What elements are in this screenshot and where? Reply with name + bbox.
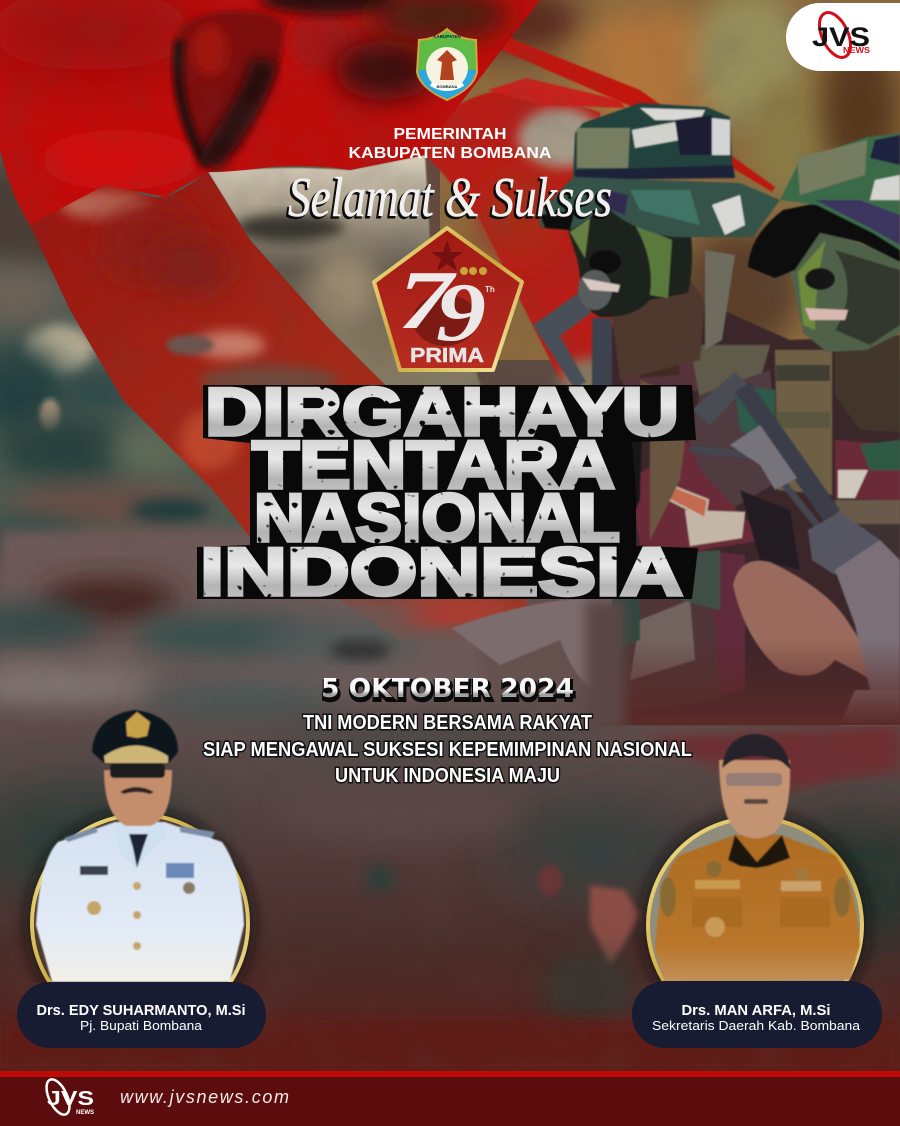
red flag: diagonal band (30, 172, 528, 640)
heading: government name: KABUPATEN BOMBANA (348, 145, 552, 162)
teal and brown storm clouds (0, 150, 600, 762)
hand gripping rifle (733, 561, 882, 678)
name plate: Man Arfa (632, 981, 882, 1048)
headline black extruded backing (197, 385, 698, 599)
top right JVS news logo: JVS (812, 22, 870, 52)
left soldier head (540, 103, 780, 380)
kabupaten bombana shield logo: BOMBANA (437, 84, 458, 89)
name plate: Man Arfa: Drs. MAN ARFA, M.Si (682, 1002, 830, 1019)
lower dark field (0, 725, 900, 1072)
right soldier head (748, 133, 900, 352)
name plate: Edy Suharmanto: Drs. EDY SUHARMANTO, M.Si (36, 1002, 246, 1019)
headline steel lettering: INDONESIA (200, 534, 683, 610)
main headline (197, 374, 698, 610)
theme tagline (203, 711, 692, 787)
rifle (452, 292, 900, 725)
cream flag fold with smoke (208, 155, 500, 440)
headline steel lettering: TENTARA (252, 427, 615, 503)
portrait: Edy Suharmanto (19, 709, 261, 983)
top right JVS news logo: NEWS (843, 46, 871, 55)
red flag: right sweep (425, 16, 775, 430)
headline steel lettering (200, 374, 683, 610)
forest backdrop (420, 0, 900, 360)
uniforms and gear (600, 300, 900, 725)
emblem: 79th PRIMA: Th (485, 285, 495, 294)
name plate: Edy Suharmanto (17, 982, 266, 1048)
script greeting: Selamat & Sukses (286, 169, 610, 231)
headline steel lettering: NASIONAL (254, 480, 620, 556)
name plate: Man Arfa: Sekretaris Daerah Kab. Bombana (652, 1019, 860, 1033)
emblem: 79th PRIMA: 7 (398, 254, 457, 347)
heading: government name: PEMERINTAH (394, 126, 506, 143)
footer JVS logo (42, 1076, 94, 1118)
website address: www.jvsnews.com (120, 1087, 289, 1107)
footer bar (0, 1071, 900, 1126)
portrait: Man Arfa (632, 733, 874, 982)
footer JVS logo: NEWS (76, 1110, 94, 1116)
kabupaten bombana shield logo: KABUPATEN (433, 34, 461, 39)
headline steel lettering: DIRGAHAYU (205, 374, 679, 450)
theme tagline: TNI MODERN BERSAMA RAKYAT (303, 711, 592, 734)
heading: government name (348, 126, 552, 162)
red flag: upper field with dark folds (0, 0, 560, 240)
emblem: 79th PRIMA (374, 228, 522, 370)
kabupaten bombana shield logo (417, 29, 477, 100)
footer JVS logo: JVS (47, 1088, 94, 1110)
name plate: Edy Suharmanto: Pj. Bupati Bombana (80, 1019, 202, 1033)
top right JVS news logo (786, 3, 900, 71)
date: 5 OKTOBER 2024 (321, 674, 574, 704)
theme tagline: SIAP MENGAWAL SUKSESI KEPEMIMPINAN NASIONAL (203, 738, 692, 761)
emblem: 79th PRIMA: PRIMA (410, 345, 484, 367)
soldiers with rifles (452, 103, 900, 730)
script greeting: Selamat & Sukses (288, 167, 612, 229)
emblem: 79th PRIMA: 9 (436, 266, 486, 359)
date: 5 OKTOBER 2024 (322, 677, 575, 707)
theme tagline: UNTUK INDONESIA MAJU (335, 764, 560, 787)
